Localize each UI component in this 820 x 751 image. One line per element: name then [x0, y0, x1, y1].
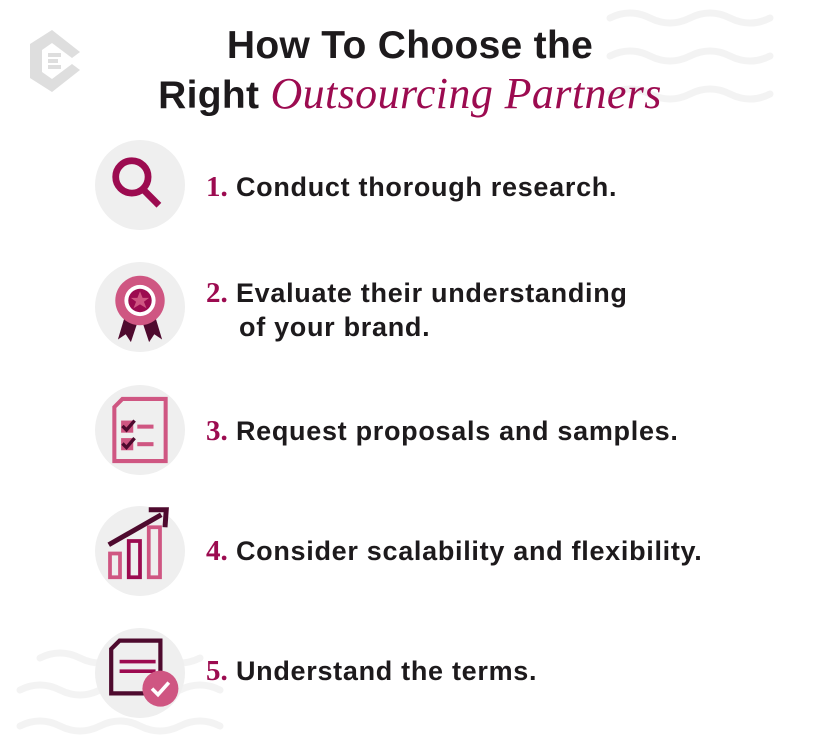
logo	[30, 30, 80, 92]
icon: document check	[95, 628, 185, 718]
item 2: of your brand.	[239, 312, 430, 342]
icon: magnifier	[95, 140, 185, 230]
title: How To Choose the	[227, 24, 593, 67]
icon: award	[95, 262, 185, 352]
icon: checklist	[95, 385, 185, 475]
icon: growth chart	[95, 506, 185, 596]
item 4: 4. Consider scalability and flexibility.	[206, 535, 702, 567]
item 1: 1. Conduct thorough research.	[206, 171, 617, 203]
title	[158, 24, 662, 118]
item 2: 2. Evaluate their understanding	[206, 277, 628, 309]
title: Right Outsourcing Partners	[158, 69, 662, 118]
item 3: 3. Request proposals and samples.	[206, 415, 679, 447]
item 2	[206, 277, 628, 342]
item 5: 5. Understand the terms.	[206, 655, 537, 687]
